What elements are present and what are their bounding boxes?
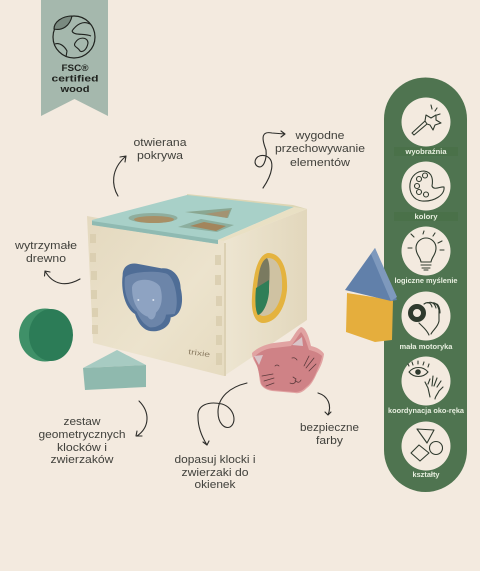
cat block <box>252 327 324 393</box>
text: otwierana pokrywa: otwierana <box>134 137 187 149</box>
text: wygodne przechowywanie elementów: przechowywanie <box>275 143 365 155</box>
box right face <box>224 209 307 376</box>
icon: magic wand <box>402 98 450 146</box>
label: logiczne myślenie: logiczne myślenie <box>394 276 458 285</box>
label: koordynacja oko-ręka: koordynacja oko-ręka <box>388 406 465 415</box>
triangle hole <box>185 208 232 218</box>
blue roof <box>345 248 397 301</box>
text: bezpieczne farby: bezpieczne <box>300 422 359 434</box>
text: wygodne przechowywanie elementów: wygodne <box>294 130 344 142</box>
teal triangle block <box>83 350 146 390</box>
wooden sorter box <box>87 194 307 376</box>
text: zestaw geometrycznych klocków i zwierzaków: zestaw <box>64 416 101 428</box>
square hole <box>178 219 234 232</box>
elephant window <box>122 263 182 331</box>
text: otwierana pokrywa: pokrywa <box>137 150 184 162</box>
trixie logo: trixie <box>188 347 211 359</box>
text: zestaw geometrycznych klocków i zwierzaków: geometrycznych <box>38 429 126 441</box>
text: bezpieczne farby <box>300 422 359 447</box>
label: kształty: kształty <box>412 470 440 479</box>
text: zestaw geometrycznych klocków i zwierzaków <box>38 416 126 466</box>
arrow: looping to fit label <box>198 383 247 445</box>
badge text <box>52 63 98 94</box>
finger joints <box>90 234 226 376</box>
text: wytrzymałe drewno <box>14 240 77 265</box>
text: zestaw geometrycznych klocków i zwierzaków: zwierzaków <box>50 454 114 466</box>
panel: benefits pill <box>384 78 467 492</box>
arrow: to lid <box>114 156 126 196</box>
icon: globe with leaf <box>53 16 95 58</box>
lid <box>92 195 307 244</box>
text: dopasuj klocki i zwierzaki do okienek: dopasuj klocki i <box>174 454 256 466</box>
icon: hand holding ring <box>402 292 450 340</box>
house blocks <box>345 248 397 342</box>
yellow side window <box>252 253 287 323</box>
badge text: wood <box>59 84 90 94</box>
text: otwierana pokrywa <box>134 137 187 162</box>
label: wyobraźnia: wyobraźnia <box>404 147 447 156</box>
text: dopasuj klocki i zwierzaki do okienek: okienek <box>194 479 236 491</box>
round hole <box>128 213 178 223</box>
FSC ribbon badge <box>41 0 108 116</box>
text: wytrzymałe drewno: drewno <box>26 253 66 265</box>
text: bezpieczne farby: farby <box>316 435 344 447</box>
arrow: looping to storage text <box>255 131 285 188</box>
text: wygodne przechowywanie elementów <box>275 130 365 169</box>
label: mała motoryka: mała motoryka <box>400 342 453 351</box>
text: wytrzymałe drewno: wytrzymałe <box>14 240 77 252</box>
text: zestaw geometrycznych klocków i zwierzaków: klocków i <box>57 442 107 454</box>
icon: geometric shapes <box>402 422 450 470</box>
icon: eye and hand <box>402 356 450 406</box>
arrow: to wood label <box>44 271 80 284</box>
label: kolory: kolory <box>414 212 438 221</box>
badge text: FSC® <box>62 63 89 73</box>
box front face <box>87 216 224 376</box>
text: dopasuj klocki i zwierzaki do okienek: zwierzaki do <box>182 467 248 479</box>
yellow block <box>346 293 393 342</box>
green cylinder block <box>19 308 73 362</box>
arrow: to set label <box>136 401 147 436</box>
icon: light bulb <box>402 226 450 276</box>
arrow: to paint label <box>318 393 331 415</box>
icon: palette <box>402 162 450 210</box>
text: wygodne przechowywanie elementów: elementów <box>290 157 350 169</box>
badge text: certified <box>52 74 98 84</box>
box back rim <box>187 194 307 209</box>
text: dopasuj klocki i zwierzaki do okienek <box>174 454 256 491</box>
